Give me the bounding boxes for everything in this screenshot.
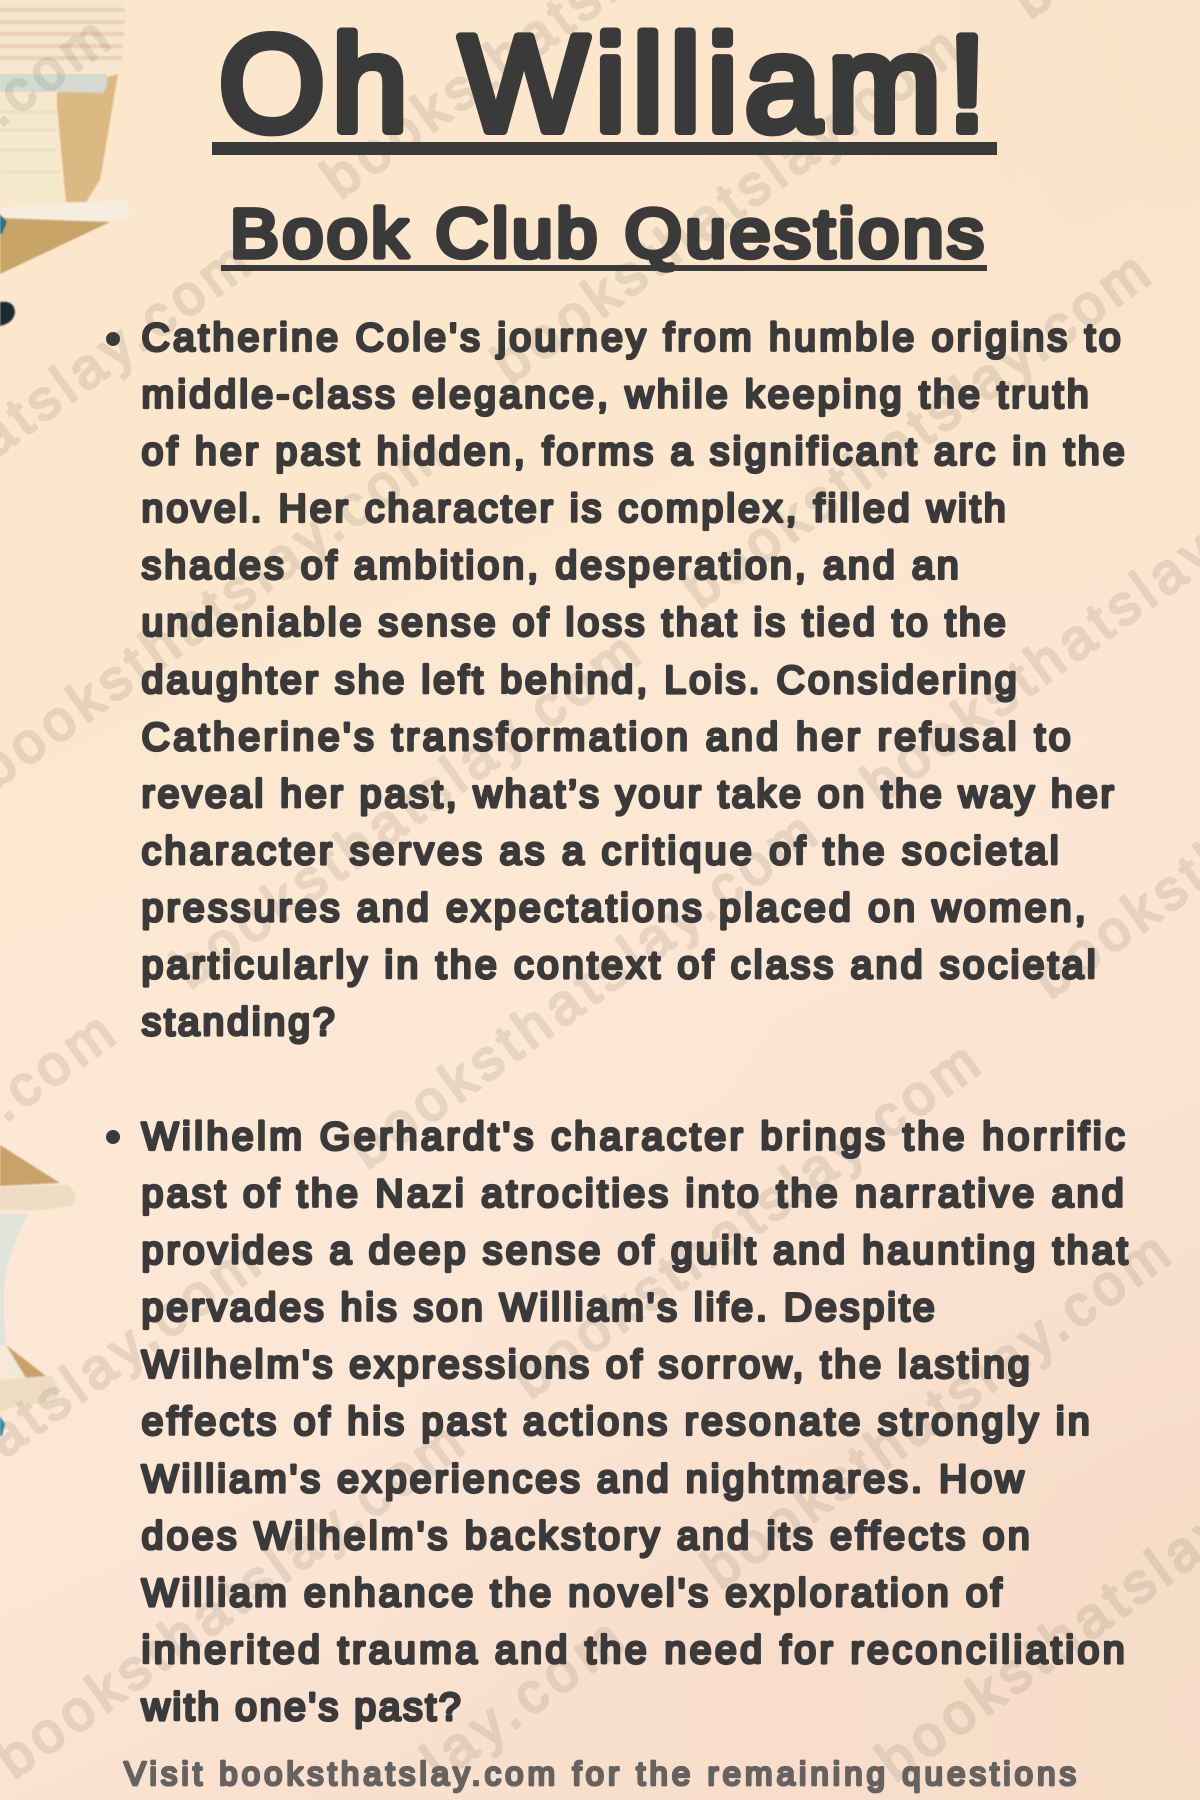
question 1 text block: middle-class elegance, while keeping the truth <box>142 374 1089 416</box>
question 2 text block: inherited trauma and the need for reconciliation <box>142 1629 1125 1672</box>
question 1 text block: Catherine Cole's journey from humble origins to <box>142 316 1121 359</box>
watermarks: booksthatslay.com: booksthatslay.com <box>670 240 1160 620</box>
question 2 text block: Wilhelm's expressions of sorrow, the lasting <box>142 1344 1030 1387</box>
question 1 text block: undeniable sense of loss that is tied to the <box>142 602 1006 645</box>
question 1 text block: of her past hidden, forms a significant arc in the <box>142 430 1125 474</box>
watermarks: booksthatslay.com: booksthatslay.com <box>480 15 970 395</box>
question 2 text block: pervades his son William's life. Despite <box>142 1287 935 1330</box>
question 2 text block: with one's past? <box>141 1686 461 1729</box>
image: top stack of books <box>0 0 130 326</box>
bullet <box>106 1130 120 1144</box>
watermarks: booksthatslay.com: booksthatslay.com <box>337 800 827 1180</box>
watermarks: booksthatslay.com: booksthatslay.com <box>500 1030 990 1410</box>
question 2 text block <box>106 1115 1128 1729</box>
subtitle: Book Club Questions <box>230 196 984 273</box>
question 2 text block: William's experiences and nightmares. How <box>142 1458 1024 1501</box>
watermarks: booksthatslay.com: booksthatslay.com <box>160 620 650 1000</box>
question 1 text block: standing? <box>142 1001 335 1044</box>
question 1 text block <box>106 316 1125 1044</box>
watermarks: booksthatslay.com: lay.com <box>410 1606 634 1793</box>
title: Oh William! <box>219 8 986 160</box>
question 2 text block: provides a deep sense of guilt and haunting that <box>142 1230 1128 1272</box>
question 1 text block: shades of ambition, desperation, and an <box>142 545 959 588</box>
question 2 text block: does Wilhelm's backstory and its effects on <box>142 1515 1030 1558</box>
question 1 text block: character serves as a critique of the societal <box>142 830 1059 873</box>
bullet <box>106 332 120 346</box>
question 2 text block: Wilhelm Gerhardt's character brings the horrific <box>142 1115 1125 1158</box>
question 1 text block: reveal her past, what’s your take on the way her <box>142 773 1114 816</box>
question 1 text block: pressures and expectations placed on women, <box>142 887 1086 930</box>
question 2 text block: William enhance the novel's exploration of <box>142 1572 1002 1615</box>
watermarks: booksthatslay.com: booksthatslay.com <box>690 1220 1180 1600</box>
question 1 text block: daughter she left behind, Lois. Considering <box>142 659 1017 702</box>
question 2 text block: effects of his past actions resonate strongly in <box>142 1401 1090 1444</box>
question 2 text block: past of the Nazi atrocities into the narrative and <box>142 1172 1124 1215</box>
question 1 text block: novel. Her character is complex, filled with <box>142 488 1006 531</box>
question 1 text block: particularly in the context of class and societal <box>142 944 1096 987</box>
image: lower stack of books <box>0 1145 75 1436</box>
question 1 text block: Catherine's transformation and her refusal to <box>142 716 1071 759</box>
footer call to action: Visit booksthatslay.com for the remaining questions <box>124 1755 1076 1792</box>
